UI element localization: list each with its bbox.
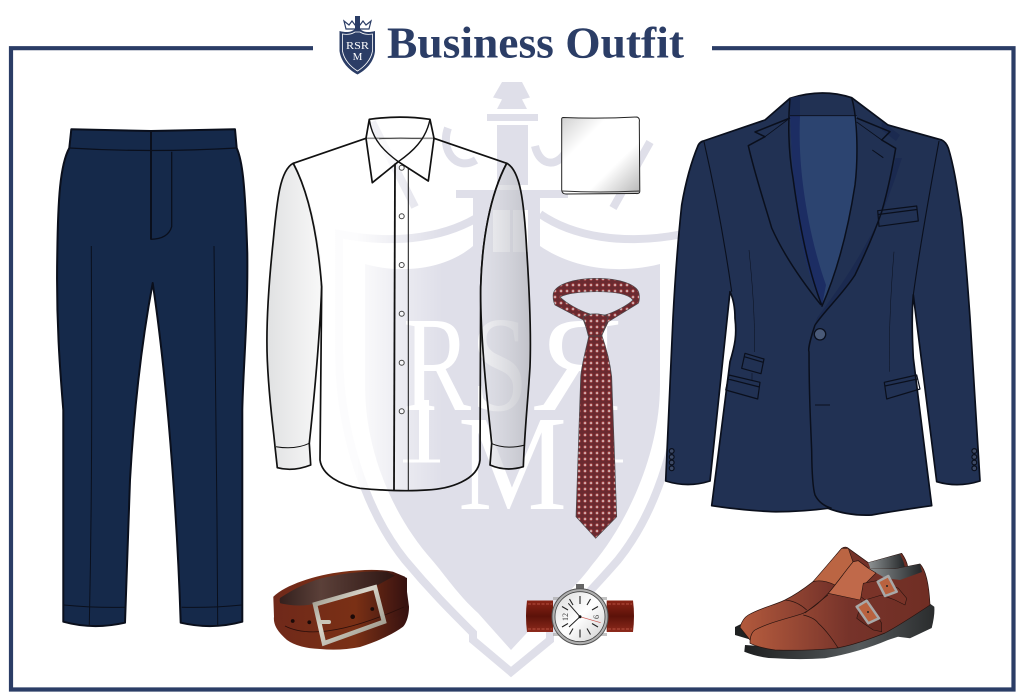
shirt left sleeve bbox=[267, 163, 322, 469]
shoe straps and buckles bbox=[861, 580, 907, 605]
jacket breast pocket bbox=[878, 206, 918, 226]
jacket hip pockets bbox=[726, 353, 920, 399]
shirt body bbox=[293, 138, 507, 491]
jacket lapel shadow bbox=[815, 122, 902, 325]
back shoe bbox=[735, 547, 908, 650]
header logo bbox=[340, 16, 375, 74]
trousers bbox=[57, 129, 247, 626]
wristwatch: 12 bbox=[561, 613, 570, 621]
necktie bbox=[553, 278, 639, 538]
title: Business Outfit bbox=[387, 18, 684, 68]
jacket collar shadow bbox=[790, 96, 800, 116]
jacket button bbox=[814, 329, 826, 340]
watermark shield logo bbox=[339, 82, 683, 672]
watermark shield logo: M bbox=[458, 389, 567, 539]
wristwatch: 6 bbox=[592, 615, 601, 619]
header logo: M bbox=[353, 51, 363, 63]
jacket lining bbox=[790, 116, 857, 306]
watermark shield logo: R bbox=[534, 290, 622, 440]
watermark shield logo: RS bbox=[403, 290, 528, 440]
jacket inner shadow bbox=[790, 116, 826, 306]
jacket sleeve buttons bbox=[669, 449, 977, 471]
jacket bbox=[666, 93, 980, 515]
shirt right sleeve bbox=[481, 163, 530, 469]
monk strap shoes bbox=[735, 547, 934, 659]
header logo: RSR bbox=[346, 40, 370, 52]
wristwatch bbox=[526, 584, 634, 645]
pocket square bbox=[562, 117, 640, 194]
shirt bbox=[267, 117, 530, 491]
front shoe bbox=[744, 561, 934, 659]
shirt placket and buttons bbox=[394, 163, 408, 490]
shirt collar bbox=[366, 117, 434, 183]
belt bbox=[273, 570, 409, 650]
